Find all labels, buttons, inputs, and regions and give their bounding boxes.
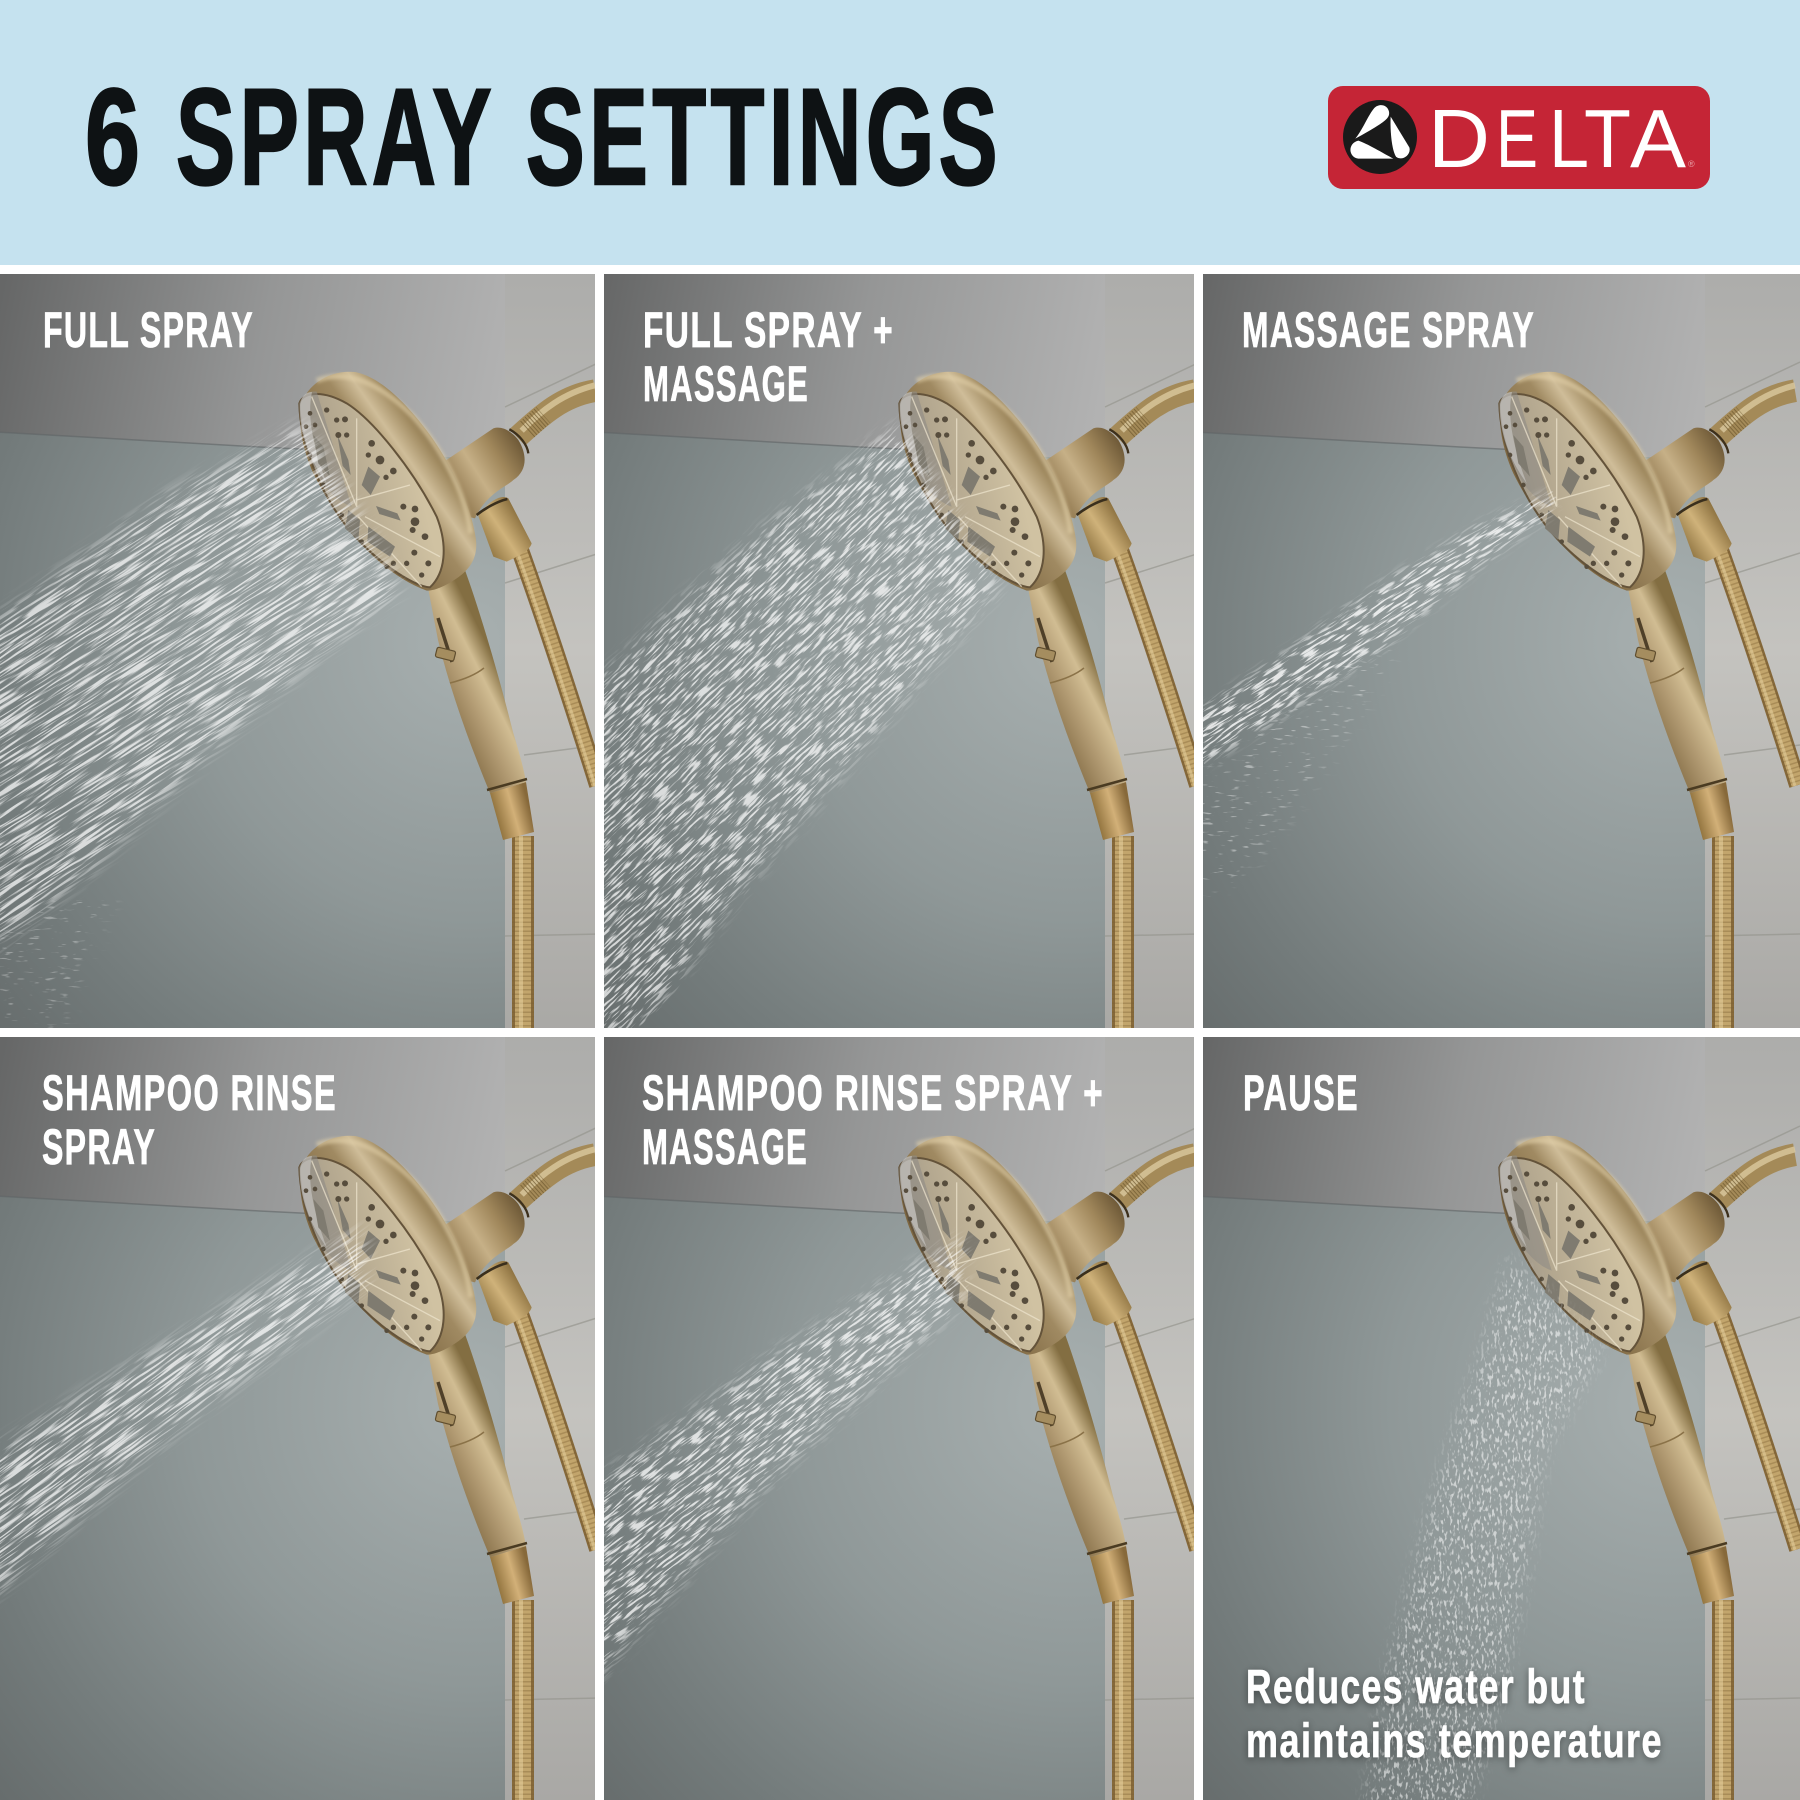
logo: Delta: [1328, 86, 1710, 189]
label: full spray + massage: FULL SPRAY +: [643, 302, 894, 358]
shower photo: shampoo rinse spray: [0, 1028, 600, 1800]
logo: Delta: ®: [1688, 159, 1695, 169]
label: shampoo rinse spray: SHAMPOO RINSE: [42, 1065, 337, 1121]
label: shampoo rinse spray: SPRAY: [42, 1119, 156, 1175]
shower photo: full spray: [0, 264, 600, 1036]
title: SPRAY: [176, 61, 496, 214]
label: shampoo rinse spray + massage: [642, 1065, 1104, 1175]
panel: shampoo rinse spray: [0, 1028, 600, 1800]
shower photo: pause: [1195, 1028, 1800, 1800]
logo: Delta: L: [1549, 92, 1589, 185]
logo: Delta: E: [1496, 92, 1538, 185]
label: full spray: FULL SPRAY: [43, 302, 254, 358]
label: shampoo rinse spray: [42, 1065, 337, 1175]
panel: full spray: [0, 264, 600, 1036]
panel: massage spray: [1203, 274, 1800, 1028]
logo: Delta: A: [1630, 92, 1687, 185]
panel: pause: [1195, 1028, 1800, 1800]
title: SETTINGS: [526, 61, 1002, 214]
shower photo: shampoo rinse spray + massage: [604, 1037, 1194, 1800]
shower photo: massage spray: [1203, 274, 1800, 1028]
label: full spray + massage: MASSAGE: [643, 356, 809, 412]
note: reduces water but maintains temperature: maintains temperature: [1246, 1715, 1663, 1768]
logo: Delta: T: [1584, 92, 1631, 185]
panel: full spray + massage: [604, 274, 1194, 1028]
label: pause: PAUSE: [1243, 1065, 1359, 1121]
label: shampoo rinse spray + massage: MASSAGE: [642, 1119, 808, 1175]
label: massage spray: MASSAGE SPRAY: [1242, 302, 1535, 358]
title: 6: [85, 61, 145, 214]
title: [85, 61, 1002, 214]
header band: [0, 0, 1800, 265]
note: reduces water but maintains temperature: Reduces water but: [1246, 1661, 1586, 1714]
logo: Delta: D: [1428, 92, 1490, 185]
label: full spray + massage: [643, 302, 894, 412]
shower photo: full spray + massage: [604, 274, 1194, 1028]
note: reduces water but maintains temperature: [1246, 1661, 1663, 1768]
panel: shampoo rinse spray + massage: [604, 1037, 1194, 1800]
label: shampoo rinse spray + massage: SHAMPOO RINSE SPRAY +: [642, 1065, 1104, 1121]
